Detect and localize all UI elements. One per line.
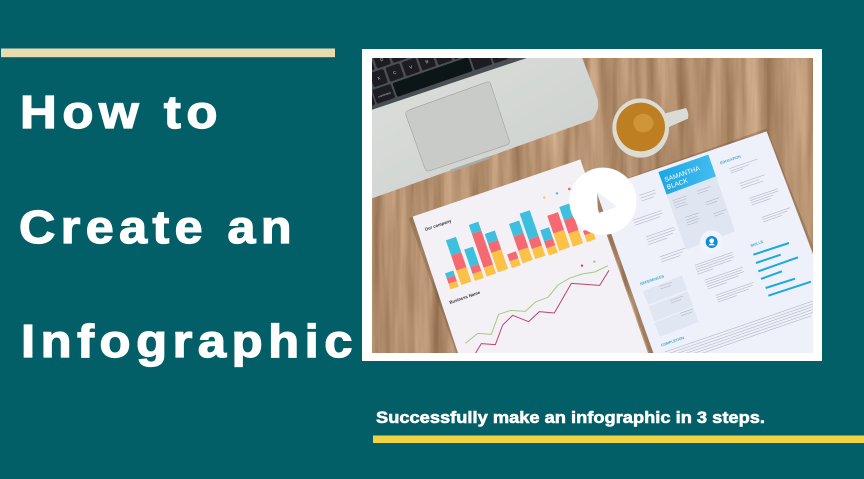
play button bbox=[569, 168, 637, 235]
chart title: Our company bbox=[424, 218, 453, 232]
stacked bars bbox=[445, 204, 596, 289]
keyboard: D bbox=[380, 57, 384, 62]
wood desk bbox=[372, 58, 813, 353]
section headings: COMPLETION bbox=[660, 336, 685, 348]
name header: SAMANTHA bbox=[664, 165, 701, 184]
section headings bbox=[640, 154, 764, 348]
name header bbox=[658, 155, 716, 195]
keyboard: X bbox=[377, 75, 381, 81]
keyboard: F bbox=[396, 51, 400, 57]
skill bars bbox=[753, 243, 811, 296]
trackpad bbox=[406, 82, 509, 171]
section headings: REFERENCES bbox=[640, 274, 665, 286]
title: Infographic bbox=[21, 315, 358, 367]
report sheet with bar and line charts bbox=[409, 159, 649, 355]
title bbox=[19, 86, 358, 367]
title: Create an bbox=[19, 201, 297, 253]
reference cards bbox=[643, 275, 699, 337]
cream accent bar bbox=[1, 48, 335, 57]
keyboard: C bbox=[392, 70, 397, 75]
legend dots bbox=[543, 188, 595, 267]
section title: Business Name bbox=[449, 290, 481, 305]
coffee cup bbox=[612, 98, 688, 158]
body text lines bbox=[633, 154, 821, 365]
laptop bbox=[372, 58, 598, 198]
section headings: SKILLS bbox=[750, 240, 764, 248]
yellow accent bar bbox=[373, 436, 864, 443]
subtitle: Successfully make an infographic in 3 steps. bbox=[376, 408, 765, 427]
section headings: EDUCATION bbox=[720, 154, 742, 165]
avatar icon bbox=[700, 230, 722, 248]
profile panel bbox=[667, 176, 735, 250]
title: How to bbox=[20, 86, 223, 138]
name header: BLACK bbox=[666, 177, 689, 191]
keyboard: command bbox=[378, 91, 392, 99]
keyboard: B bbox=[425, 59, 429, 64]
line chart bbox=[465, 266, 609, 353]
photo frame bbox=[362, 49, 822, 361]
keyboard bbox=[372, 58, 526, 110]
photo: desk scene bbox=[372, 58, 813, 353]
resume sheet bbox=[597, 128, 813, 353]
keyboard: V bbox=[409, 64, 413, 70]
